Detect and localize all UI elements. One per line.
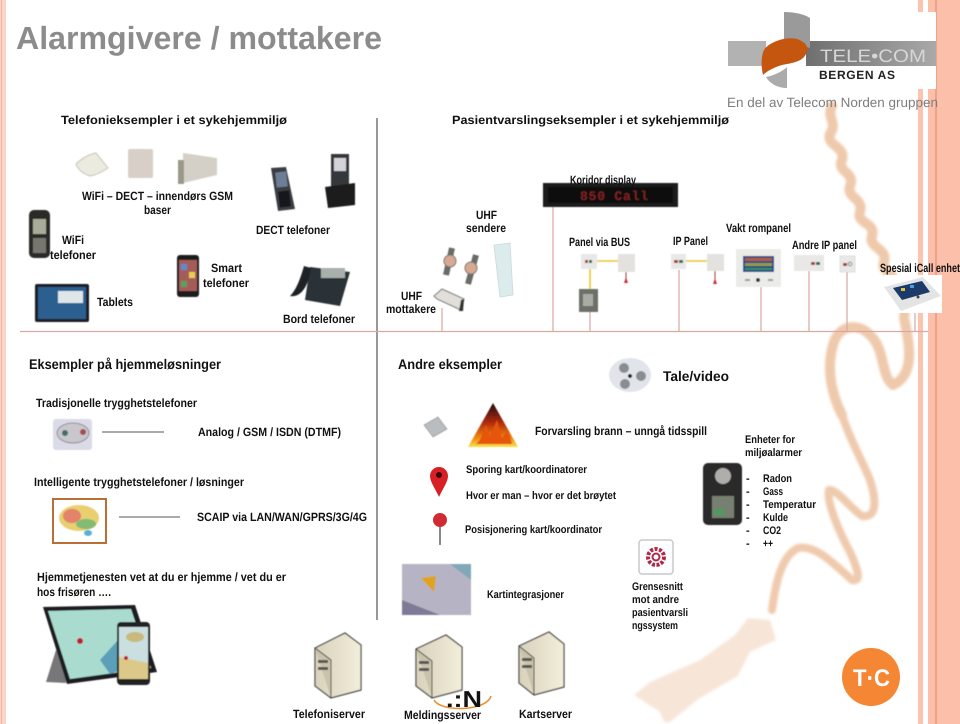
label: base stations: WiFi – DECT – innendørs GSM bbox=[82, 189, 233, 203]
icon: DECT phone bbox=[271, 167, 295, 211]
title: Alarmgivere / mottakere bbox=[16, 20, 382, 56]
text: home care note bbox=[37, 570, 286, 599]
list: alarm types: Gass bbox=[763, 486, 783, 498]
icon: wifi access point bbox=[76, 153, 108, 176]
text: home care note: Hjemmetjenesten vet at du er hjemme / vet du er bbox=[37, 570, 286, 584]
other IP panel devices bbox=[794, 255, 855, 272]
tablet and phone with map bbox=[43, 605, 157, 685]
label: map integrations: Kartintegrasjoner bbox=[487, 589, 565, 601]
list: alarm types: ++ bbox=[763, 538, 773, 550]
server: messaging bbox=[416, 635, 462, 698]
label: UHF transmitters: UHF bbox=[476, 208, 497, 222]
label: environmental alarms bbox=[745, 434, 803, 459]
label: IP panel: IP Panel bbox=[673, 234, 708, 248]
icon: speaker unit bbox=[609, 358, 651, 392]
label: smartphones: telefoner bbox=[203, 276, 249, 290]
label: UHF receivers: mottakere bbox=[386, 302, 436, 316]
IP panel devices bbox=[671, 254, 724, 284]
logo: Telecom Bergen: TELE•COM bbox=[820, 46, 926, 66]
label: where: Hvor er man – hvor er det brøytet bbox=[466, 490, 616, 502]
column heading: telephony: Telefonieksempler i et sykehjemmiljø bbox=[61, 113, 288, 127]
label: messaging server: Meldingsserver bbox=[404, 708, 481, 722]
icon: gas detector bbox=[703, 463, 742, 525]
icon: DECT base bbox=[128, 149, 153, 178]
label: duty room panel: Vakt rompanel bbox=[726, 221, 791, 235]
icon: integration gear bbox=[639, 540, 673, 574]
label: positioning: Posisjonering kart/koordinator bbox=[465, 524, 603, 536]
icon: smoke sensor bbox=[424, 417, 447, 437]
iCall device bbox=[884, 275, 942, 313]
list: alarm types: - bbox=[746, 486, 750, 498]
label: DECT phones: DECT telefoner bbox=[256, 223, 330, 237]
icon: UHF wrist transmitters bbox=[444, 248, 477, 284]
list: alarm types: - bbox=[746, 525, 750, 537]
label: corridor display: Koridor display bbox=[570, 173, 636, 187]
icon: map marker bbox=[430, 467, 448, 497]
duty room panel device bbox=[736, 249, 781, 287]
label: WiFi phones bbox=[50, 233, 96, 262]
label: smartphones bbox=[203, 261, 249, 290]
label: SCAIP connection: SCAIP via LAN/WAN/GPRS/3G/4G bbox=[197, 510, 367, 524]
server: telephony bbox=[315, 633, 361, 698]
logo: N mark bbox=[434, 686, 491, 712]
label: tracking map: Sporing kart/koordinatorer bbox=[466, 464, 588, 476]
icon: GSM antenna bbox=[178, 153, 217, 184]
connector line bbox=[102, 431, 164, 433]
label: map server: Kartserver bbox=[519, 707, 572, 721]
list: alarm types: - bbox=[746, 499, 750, 511]
column heading: patient call: Pasientvarslingseksempler i et sykehjemmiljø bbox=[452, 113, 730, 127]
list: alarm types: Radon bbox=[763, 473, 792, 485]
heading: home solutions: Eksempler på hjemmeløsninger bbox=[29, 356, 221, 372]
label: analog connection: Analog / GSM / ISDN (DTMF) bbox=[198, 425, 341, 439]
label: telephony server: Telefoniserver bbox=[293, 707, 365, 721]
network bus line bbox=[20, 207, 928, 332]
icon: fire triangle bbox=[468, 403, 518, 447]
label: fire warning: Forvarsling brann – unngå tidsspill bbox=[535, 424, 707, 438]
list: alarm types: - bbox=[746, 538, 750, 550]
heading: other examples: Andre eksempler bbox=[398, 356, 503, 372]
icon: tablet bbox=[35, 284, 89, 322]
label: interfaces: ngssystem bbox=[632, 620, 678, 632]
icon: DECT phone in cradle bbox=[325, 154, 355, 208]
icon: safety phone bbox=[53, 419, 92, 450]
icon: UHF receiver bbox=[434, 289, 464, 311]
icon: UHF pull cord transmitter bbox=[494, 243, 513, 297]
base stations bbox=[76, 149, 217, 184]
list: alarm types: Kulde bbox=[763, 512, 788, 524]
list: alarm types: Temperatur bbox=[763, 499, 817, 511]
label: smartphones: Smart bbox=[211, 261, 242, 275]
panel via bus devices bbox=[579, 254, 635, 312]
map integration thumbnail bbox=[402, 564, 471, 615]
logo: N mark: .:N bbox=[446, 686, 482, 712]
label: interfaces bbox=[632, 581, 688, 632]
label: base stations line 2: baser bbox=[144, 203, 171, 217]
corridor display: 850 Call bbox=[580, 189, 648, 204]
logo: Telecom Bergen bbox=[724, 12, 936, 89]
icon: desk phone bbox=[290, 266, 350, 306]
logo: Telecom Bergen: BERGEN AS bbox=[819, 68, 895, 82]
label: panel via bus: Panel via BUS bbox=[569, 235, 630, 249]
icon: brain word cloud bbox=[53, 499, 106, 543]
list: alarm types bbox=[746, 473, 817, 550]
list: alarm types: - bbox=[746, 473, 750, 485]
telephone handset with coiled cord bbox=[634, 106, 909, 722]
vertical divider bbox=[376, 118, 378, 620]
label: WiFi phones: WiFi bbox=[62, 233, 84, 247]
text: home care note: hos frisøren …. bbox=[37, 585, 111, 599]
label: other IP panels: Andre IP panel bbox=[792, 238, 857, 252]
list: alarm types: - bbox=[746, 512, 750, 524]
handset body bbox=[634, 618, 776, 722]
label: voice and video: Tale/video bbox=[663, 368, 729, 384]
corridor display bbox=[543, 183, 678, 207]
icon: smartphone bbox=[177, 255, 199, 297]
label: interfaces: pasientvarsli bbox=[632, 607, 688, 619]
label: UHF transmitters: sendere bbox=[466, 221, 506, 235]
logo tagline: En del av Telecom Norden gruppen bbox=[727, 95, 938, 110]
label: UHF receivers bbox=[386, 289, 436, 316]
label: environmental alarms: Enheter for bbox=[745, 434, 796, 446]
logo: T-C badge: T·C bbox=[853, 665, 890, 692]
icon: pushpin bbox=[433, 513, 447, 545]
label: environmental alarms: miljøalarmer bbox=[745, 447, 803, 459]
label: interfaces: mot andre bbox=[632, 594, 679, 606]
logo: T-C badge bbox=[842, 648, 900, 706]
label: intelligent safety phones: Intelligente trygghetstelefoner / løsninger bbox=[34, 475, 244, 489]
label: WiFi phones: telefoner bbox=[50, 248, 96, 262]
label: traditional safety phones: Tradisjonelle trygghetstelefoner bbox=[36, 396, 197, 410]
connector line bbox=[119, 516, 180, 518]
label: UHF transmitters bbox=[466, 208, 506, 235]
icon: WiFi phone bbox=[29, 210, 50, 258]
server: map bbox=[519, 632, 564, 695]
label: interfaces: Grensesnitt bbox=[632, 581, 683, 593]
label: UHF receivers: UHF bbox=[401, 289, 422, 303]
label: desk phones: Bord telefoner bbox=[283, 312, 355, 326]
label: tablets: Tablets bbox=[97, 295, 133, 309]
list: alarm types: CO2 bbox=[763, 525, 781, 537]
